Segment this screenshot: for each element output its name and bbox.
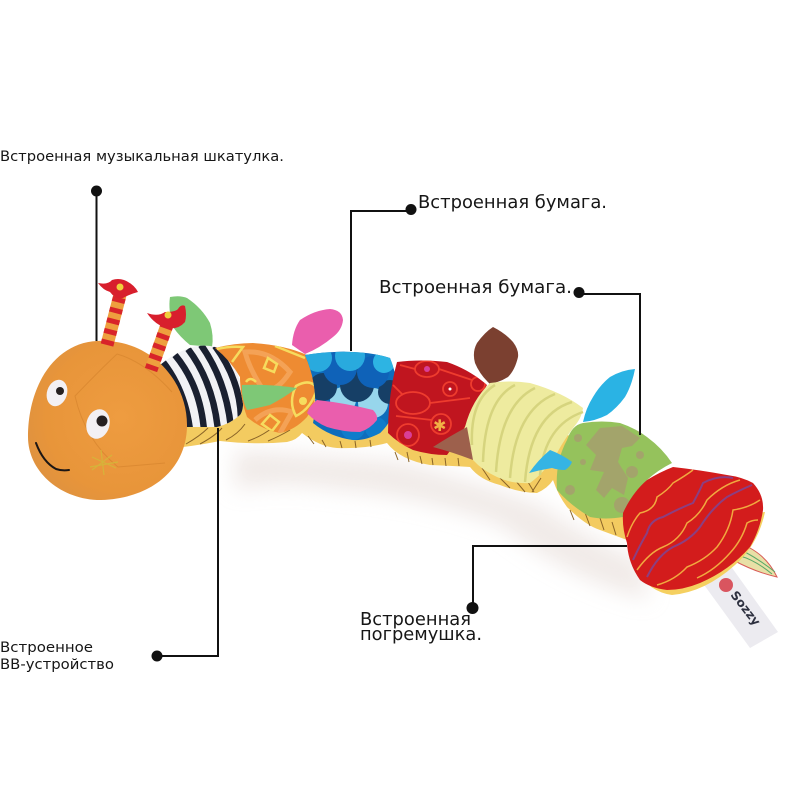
tail loop	[733, 548, 777, 577]
leaf: cyan	[583, 369, 635, 422]
red segment: ✱	[433, 416, 446, 435]
green segment	[556, 422, 672, 518]
antenna left	[98, 279, 138, 345]
callout: BB device	[0, 428, 218, 673]
mouth	[36, 443, 69, 470]
label: BB device: Встроенное	[0, 640, 93, 656]
label: rattle: Встроенная	[360, 609, 471, 630]
callout: rattle	[360, 546, 627, 645]
end red segment	[632, 512, 765, 595]
leaf: cyan low	[529, 450, 572, 473]
dot: BB device	[152, 650, 162, 662]
dot: rattle	[466, 602, 478, 614]
dot: paper right	[574, 287, 584, 298]
leader line: paper right	[579, 294, 640, 435]
toy shadow	[235, 450, 650, 600]
label: rattle: погремушка.	[360, 624, 482, 645]
label: BB device: BB-устройство	[0, 657, 114, 673]
body underside	[183, 400, 640, 540]
leader line: rattle	[473, 546, 627, 608]
red segment	[388, 360, 487, 455]
label: music box: Встроенная музыкальная шкатулка.	[0, 149, 284, 165]
left eye	[43, 377, 71, 409]
dot: music box	[91, 186, 102, 196]
label: paper top: Встроенная бумага.	[418, 192, 607, 213]
leaf: brown	[474, 327, 518, 384]
callout: paper right	[379, 277, 640, 435]
callout: music box	[0, 149, 284, 341]
icon: ladybug	[719, 578, 733, 592]
label: paper right: Встроенная бумага.	[379, 277, 572, 298]
leaf: pink low	[307, 400, 377, 432]
leaf: pink top	[292, 309, 343, 354]
orange segment	[215, 343, 315, 433]
illustration: caterpillar toy	[28, 279, 778, 648]
head	[28, 341, 187, 500]
right eye	[83, 407, 113, 441]
tag	[702, 565, 778, 648]
dot: paper top	[406, 204, 416, 215]
callout: paper top	[351, 192, 607, 351]
leaf: green flat	[242, 385, 297, 410]
leaf: brown triangle	[433, 427, 473, 460]
leaf: green	[169, 296, 213, 347]
stripe segment	[161, 346, 244, 427]
yellow corduroy segment	[465, 382, 583, 483]
star stitch	[90, 450, 118, 475]
leader line: music box	[96, 191, 98, 341]
leader line: paper top	[351, 211, 411, 351]
tag: Sozzy	[728, 588, 763, 629]
blue segment	[305, 352, 394, 440]
antenna right	[147, 305, 186, 370]
leader line: BB device	[157, 428, 218, 656]
